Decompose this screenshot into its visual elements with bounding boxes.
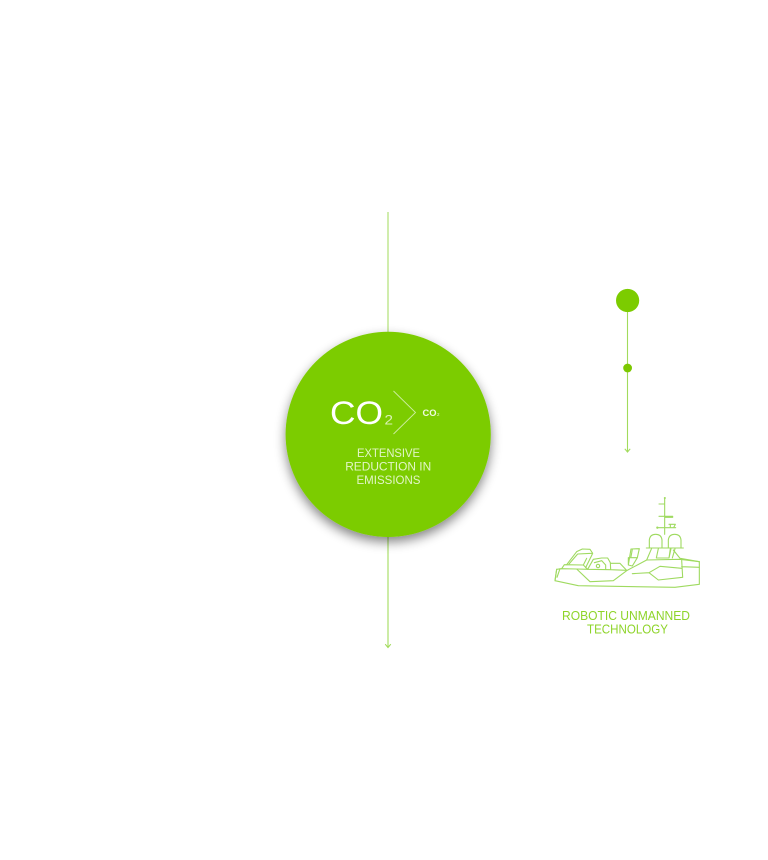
green circle [286,332,491,537]
small timeline node [623,364,632,372]
circle caption: EMISSIONS [356,473,420,487]
arrow: line below central circle [385,535,391,648]
vertical line above central circle [387,212,389,334]
boat caption: TECHNOLOGY [587,622,669,636]
small CO2 label: 2 [437,412,440,417]
icon: reduction chevron [394,391,416,434]
boat caption [562,609,690,636]
panel: emissions reduction circle [286,332,491,537]
circle caption [345,446,431,487]
circle caption: EXTENSIVE [357,446,420,460]
small CO2 label: CO [422,408,436,419]
arrow: timeline connector on the right [625,310,630,452]
icon: robotic unmanned boat [555,497,699,587]
boat caption: ROBOTIC UNMANNED [562,609,690,623]
circle caption: REDUCTION IN [345,460,431,474]
large CO2 label: 2 [384,412,393,428]
large CO2 label: CO [330,395,383,431]
large timeline node [616,289,639,312]
